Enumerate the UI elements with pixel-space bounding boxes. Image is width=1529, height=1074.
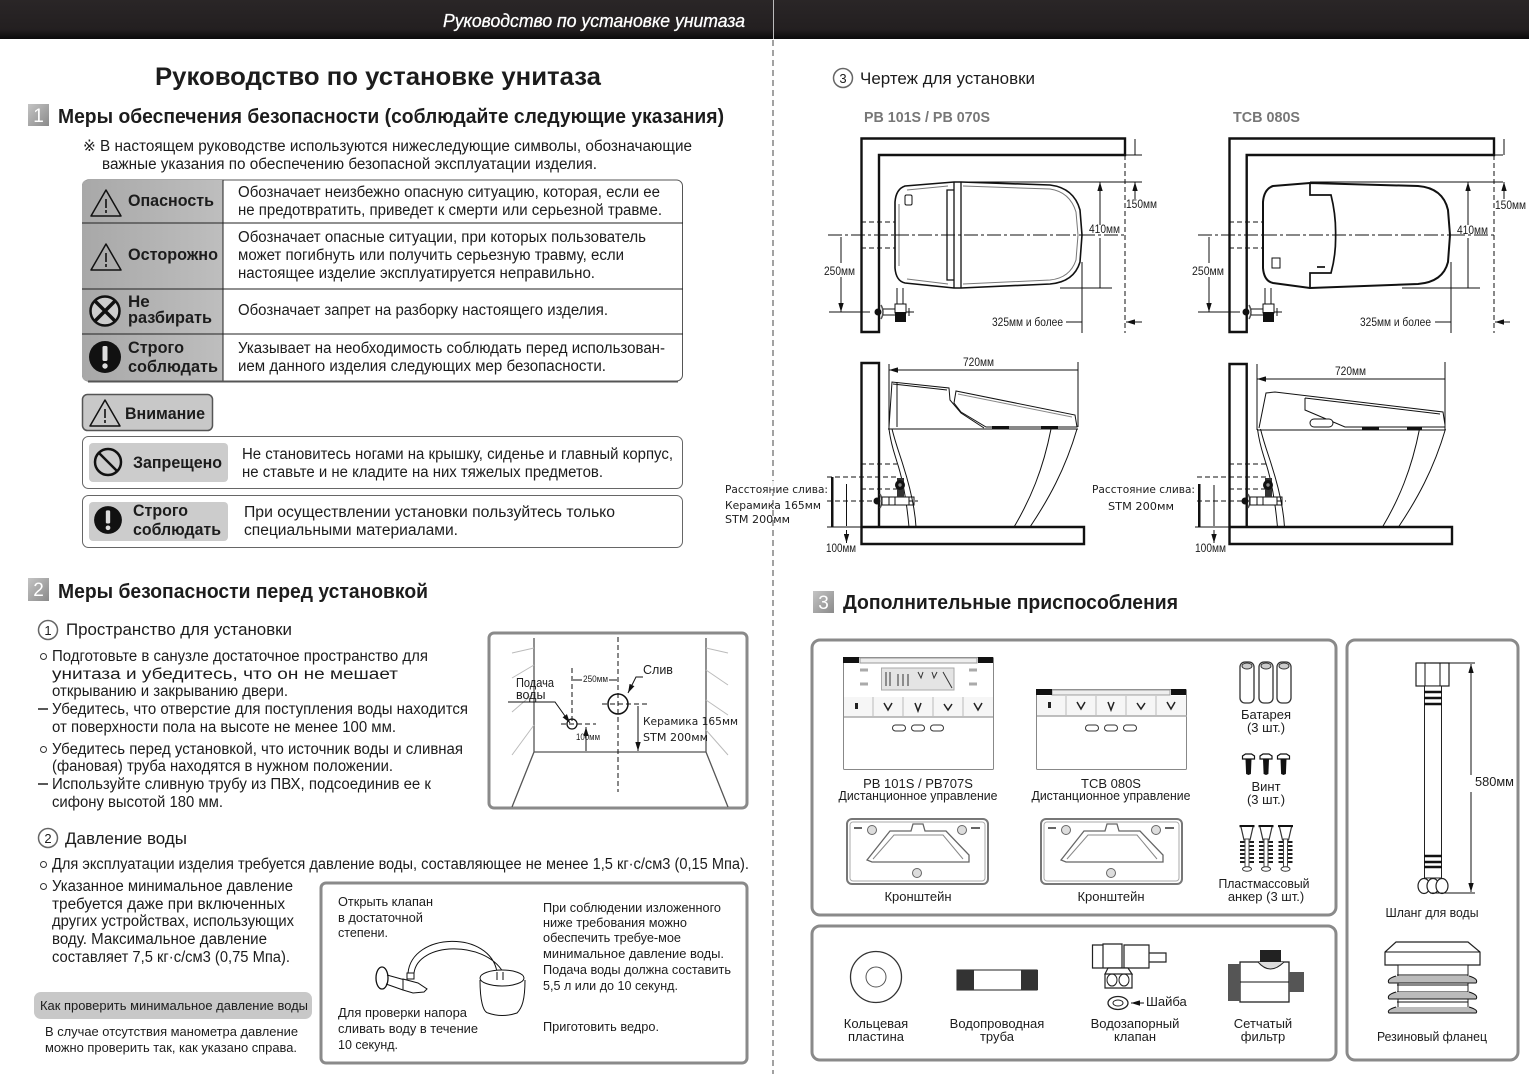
- subheading: water pressure: Давление воды: [65, 829, 187, 848]
- row: caution: настоящее изделие эксплуатируется неправильно.: [238, 265, 595, 282]
- subheading: installation space: Пространство для установки: [66, 620, 292, 639]
- remote TCB 080S: Дистанционное управление: [1032, 788, 1190, 803]
- model label: PB 101S / PB 070S: PB 101S / PB 070S: [864, 110, 990, 126]
- drain distance label: Расстояние слива:: [725, 484, 828, 496]
- row: caution: может погибнуть или получить серьезную травму, если: [238, 247, 624, 264]
- drain outlet: [602, 663, 673, 714]
- dimension lines: 150мм: [1495, 200, 1526, 212]
- mesh filter: фильтр: [1241, 1029, 1285, 1044]
- screws: (3 шт.): [1247, 792, 1285, 807]
- row: strictly follow: Строго: [128, 338, 184, 357]
- row: strictly follow: Указывает на необходимость соблюдать перед использован-: [238, 340, 665, 357]
- section 3 heading: 3: [818, 593, 829, 614]
- panel: pressure test: [321, 883, 747, 1063]
- row: danger: Обозначает неизбежно опасную ситуацию, которая, если ее: [238, 184, 660, 201]
- text: installation space instructions: (фановая) труба находятся в нужном положении.: [52, 758, 393, 775]
- row: strictly follow: [89, 338, 665, 376]
- text: open the valve: степени.: [338, 925, 388, 940]
- dimension lines: [823, 139, 1157, 329]
- mesh filter: [1228, 950, 1304, 1044]
- section 3 heading: Дополнительные приспособления: [843, 592, 1178, 614]
- dimensions: 100мм: [826, 543, 856, 555]
- ring plate: [844, 952, 908, 1044]
- text: installation space instructions: Используйте сливную трубу из ПВХ, подсоединив ее к: [52, 776, 431, 793]
- attention badge: Внимание: [125, 404, 205, 423]
- text: water pressure requirements: составляет 7,5 кг·с/см3 (0,75 Мпа).: [52, 949, 290, 966]
- row: do not disassemble: [90, 292, 608, 327]
- text: water pressure requirements: Указанное минимальное давление: [52, 878, 293, 895]
- dimension lines: 410мм: [1089, 224, 1120, 236]
- text: installation space instructions: открыванию и закрыванию двери.: [52, 683, 288, 700]
- intro note: [83, 138, 692, 173]
- text: open the valve: [338, 894, 433, 940]
- drain distance label: [724, 481, 829, 526]
- shut-off valve: [1091, 944, 1188, 1044]
- dimension lines: 250мм: [824, 266, 855, 278]
- subheading: installation space: 1: [44, 623, 52, 638]
- row: danger: не предотвратить, приведет к смерти или серьезной травме.: [238, 202, 662, 219]
- text: flow requirement: При соблюдении изложенного: [543, 900, 721, 915]
- drain outlet: Слив: [643, 663, 673, 677]
- rubber flange: Резиновый фланец: [1377, 1029, 1488, 1044]
- drain distance label: Расстояние слива:: [1092, 484, 1195, 496]
- shut-off valve: Шайба: [1146, 994, 1188, 1009]
- text: water pressure requirements: Для эксплуатации изделия требуется давление воды, составляющее не менее 1,5 кг·с/см3 (0,15 Мпа).: [52, 856, 749, 873]
- dimensions: STM 200мм: [643, 732, 708, 744]
- screws: Винт: [1251, 779, 1281, 794]
- section 2 heading: Меры безопасности перед установкой: [58, 581, 428, 603]
- text: drain for ten seconds: сливать воду в течение: [338, 1021, 478, 1036]
- text: water pressure requirements: требуется даже при включенных: [52, 896, 285, 913]
- drain distance label: STM 200мм: [725, 514, 790, 526]
- row: strictly follow: соблюдать: [128, 357, 218, 376]
- panel: strictly follow: [82, 496, 682, 548]
- strictly follow label: [89, 501, 228, 541]
- batteries: Батарея: [1241, 707, 1291, 722]
- drawing: PB side view: [724, 356, 1084, 555]
- row: do not disassemble: Обозначает запрет на разборку настоящего изделия.: [238, 302, 608, 319]
- water hose: [1386, 663, 1514, 920]
- strictly follow label: соблюдать: [133, 520, 221, 539]
- wall valve: [874, 288, 914, 322]
- panel: safety symbols table: [82, 180, 683, 382]
- text: installation space instructions: сифону высотой 180 мм.: [52, 794, 223, 811]
- text: drain for ten seconds: [338, 1005, 478, 1052]
- drain distance label: Керамика 165мм: [725, 500, 821, 512]
- text: drain for ten seconds: 10 секунд.: [338, 1037, 398, 1052]
- dimensions: 720мм: [1335, 366, 1366, 378]
- panel: prohibited: Не становитесь ногами на крышку, сиденье и главный корпус,: [242, 446, 673, 463]
- text: open the valve: в достаточной: [338, 910, 423, 925]
- remote PB 101S: PB 101S / PB707S: [863, 776, 973, 791]
- remote TCB 080S: TCB 080S: [1081, 776, 1141, 791]
- dimension lines: 250мм: [1192, 266, 1224, 278]
- dimensions: [1195, 365, 1445, 555]
- panel: hose and flange: [1347, 640, 1518, 1060]
- prohibited label: [89, 443, 228, 482]
- ring plate: Кольцевая: [844, 1016, 908, 1031]
- dimension lines: 325мм и более: [1360, 317, 1431, 329]
- subheading: installation drawing: Чертеж для установки: [860, 69, 1035, 88]
- drain distance label: [1092, 484, 1195, 513]
- bracket left: Кронштейн: [884, 889, 952, 904]
- drawing: PB top view: [823, 138, 1157, 333]
- plastic anchors: Пластмассовый: [1218, 876, 1310, 891]
- text: water pressure requirements: других устройствах, использующих: [52, 913, 294, 930]
- text: installation space instructions: унитаза и убедитесь, что он не мешает: [52, 666, 398, 683]
- callout: how to check minimum pressure: можно проверить так, как указано справа.: [45, 1040, 297, 1055]
- section 2 heading: 2: [33, 580, 44, 601]
- water hose: 580мм: [1475, 774, 1514, 789]
- dimension lines: 410мм: [1457, 225, 1488, 237]
- row: caution: [91, 229, 646, 282]
- dimensions: Керамика 165мм: [643, 716, 738, 728]
- dimension lines: [1191, 139, 1526, 329]
- row: strictly follow: ием данного изделия следующих мер безопасности.: [238, 358, 606, 375]
- water inlet: воды: [516, 688, 545, 702]
- subheading: water pressure: 2: [44, 831, 52, 846]
- illustration: valve, hose and bucket: [376, 941, 525, 1016]
- dimension lines: 150мм: [1126, 199, 1157, 211]
- text: flow requirement: минимальное давление воды.: [543, 946, 724, 961]
- dimensions: 720мм: [963, 357, 994, 369]
- plastic anchors: анкер (3 шт.): [1228, 889, 1304, 904]
- text: flow requirement: обеспечить требуе-мое: [543, 930, 681, 945]
- dimensions: [573, 674, 738, 751]
- plastic anchors: [1218, 825, 1310, 904]
- bracket right: Кронштейн: [1077, 889, 1145, 904]
- panel: strictly follow: специальными материалами.: [244, 522, 458, 539]
- water pipe: Водопроводная: [950, 1016, 1044, 1031]
- row: caution: Осторожно: [128, 245, 218, 264]
- text: open the valve: Открыть клапан: [338, 894, 433, 909]
- text: water pressure requirements: воду. Максимальное давление: [52, 931, 267, 948]
- panel: wall layout diagram: [489, 633, 747, 808]
- drawing: TCB top view: [1191, 138, 1526, 333]
- callout: how to check minimum pressure: В случае отсутствия манометра давление: [45, 1024, 298, 1039]
- dimension lines: 325мм и более: [992, 317, 1063, 329]
- panel: prohibited: [82, 436, 682, 488]
- row: caution: Обозначает опасные ситуации, при которых пользователь: [238, 229, 646, 246]
- text: drain for ten seconds: Для проверки напора: [338, 1005, 468, 1020]
- drain distance label: STM 200мм: [1108, 501, 1174, 513]
- callout: how to check minimum pressure: [34, 992, 312, 1055]
- dimensions: 100мм: [576, 732, 600, 743]
- water inlet: Подача: [516, 676, 554, 690]
- text: installation space instructions: [38, 648, 468, 811]
- header title: Руководство по установке унитаза: [443, 11, 745, 31]
- bracket right: [1041, 819, 1182, 904]
- water hose: Шланг для воды: [1386, 905, 1478, 920]
- shut-off valve: клапан: [1114, 1029, 1156, 1044]
- toilet outline: [1263, 183, 1450, 288]
- panel: remotes, brackets, small parts: [812, 640, 1336, 915]
- water pipe: [950, 970, 1044, 1044]
- shut-off valve: Водозапорный: [1091, 1016, 1179, 1031]
- batteries: [1240, 662, 1291, 735]
- section 1 heading: 1: [33, 106, 44, 127]
- text: flow requirement: 5,5 л или до 10 секунд.: [543, 978, 678, 993]
- mesh filter: Сетчатый: [1234, 1016, 1292, 1031]
- header bar: [0, 0, 1529, 39]
- row: danger: Опасность: [128, 191, 214, 210]
- text: installation space instructions: Убедитесь перед установкой, что источник воды и сливная: [52, 741, 463, 758]
- panel: plate, pipe, valve, filter: [812, 926, 1336, 1060]
- subheading: installation drawing: 3: [839, 71, 847, 86]
- model label: TCB 080S: TCB 080S: [1233, 110, 1300, 126]
- bracket left: [847, 819, 988, 904]
- wall valve: [1242, 288, 1282, 322]
- row: danger: [91, 184, 662, 219]
- screws: [1242, 754, 1290, 807]
- dimensions: 250мм: [583, 674, 608, 685]
- rubber flange: [1377, 942, 1488, 1044]
- text: installation space instructions: от поверхности пола на высоте не менее 100 мм.: [52, 719, 396, 736]
- remote PB 101S: Дистанционное управление: [838, 788, 998, 803]
- panel: strictly follow: При осуществлении установки пользуйтесь только: [244, 504, 615, 521]
- text: prepare a bucket: Приготовить ведро.: [543, 1019, 659, 1034]
- text: installation space instructions: Убедитесь, что отверстие для поступления воды находится: [52, 701, 468, 718]
- panel: prohibited: не ставьте и не кладите на них тяжелых предметов.: [242, 464, 603, 481]
- water pipe: труба: [980, 1029, 1015, 1044]
- dimensions: 100мм: [1195, 543, 1226, 555]
- remote PB 101S: [838, 657, 998, 803]
- text: flow requirement: Подача воды должна составить: [543, 962, 731, 977]
- text: water pressure requirements: [40, 856, 749, 966]
- page title: Руководство по установке унитаза: [155, 63, 602, 91]
- intro note: важные указания по обеспечению безопасной эксплуатации изделия.: [102, 156, 597, 173]
- dimensions: [826, 356, 1078, 555]
- batteries: (3 шт.): [1247, 720, 1285, 735]
- callout: how to check minimum pressure: Как проверить минимальное давление воды: [40, 998, 308, 1013]
- ring plate: пластина: [848, 1029, 905, 1044]
- remote TCB 080S: [1032, 689, 1190, 803]
- strictly follow label: Строго: [133, 501, 188, 520]
- text: flow requirement: ниже требования можно: [543, 915, 687, 930]
- attention badge: [82, 394, 212, 430]
- row: do not disassemble: Не: [128, 292, 150, 311]
- section 1 heading: Меры обеспечения безопасности (соблюдайте следующие указания): [58, 106, 724, 128]
- intro note: ※ В настоящем руководстве используются нижеследующие символы, обозначающие: [83, 138, 692, 155]
- water inlet: [508, 676, 596, 729]
- text: flow requirement: [543, 900, 731, 993]
- prohibited label: Запрещено: [133, 453, 222, 472]
- row: do not disassemble: разбирать: [128, 308, 212, 327]
- text: installation space instructions: Подготовьте в санузле достаточное пространство для: [52, 648, 428, 665]
- toilet outline: [895, 182, 1082, 288]
- drawing: TCB side view: [1092, 362, 1452, 555]
